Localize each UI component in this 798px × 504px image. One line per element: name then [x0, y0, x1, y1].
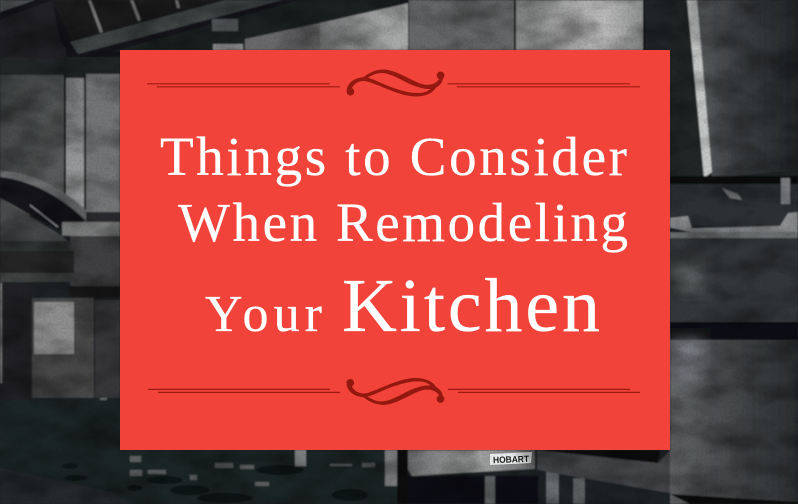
appliance box — [408, 450, 535, 476]
red title panel — [120, 50, 670, 450]
pot lid — [0, 171, 120, 246]
right steel panels — [670, 0, 798, 504]
floor — [0, 400, 400, 504]
heading line 3: Your — [205, 286, 322, 343]
heading line 1: Things to Consider — [160, 126, 627, 187]
brand plate: HOBART — [493, 454, 530, 465]
equipment legs — [295, 450, 585, 504]
heading line 3: Kitchen — [342, 264, 600, 348]
heading line 2: When Remodeling — [178, 192, 628, 253]
heading — [160, 126, 628, 348]
left wall and pillar — [0, 74, 120, 216]
bottom ornament — [148, 378, 640, 404]
top ornament — [147, 70, 640, 96]
counter and cabinet — [0, 222, 120, 424]
label plate — [34, 302, 74, 354]
hood and ceiling — [0, 0, 798, 78]
heading line 3 — [205, 264, 600, 348]
upper wall panels — [245, 0, 690, 50]
right base unit — [537, 450, 798, 504]
